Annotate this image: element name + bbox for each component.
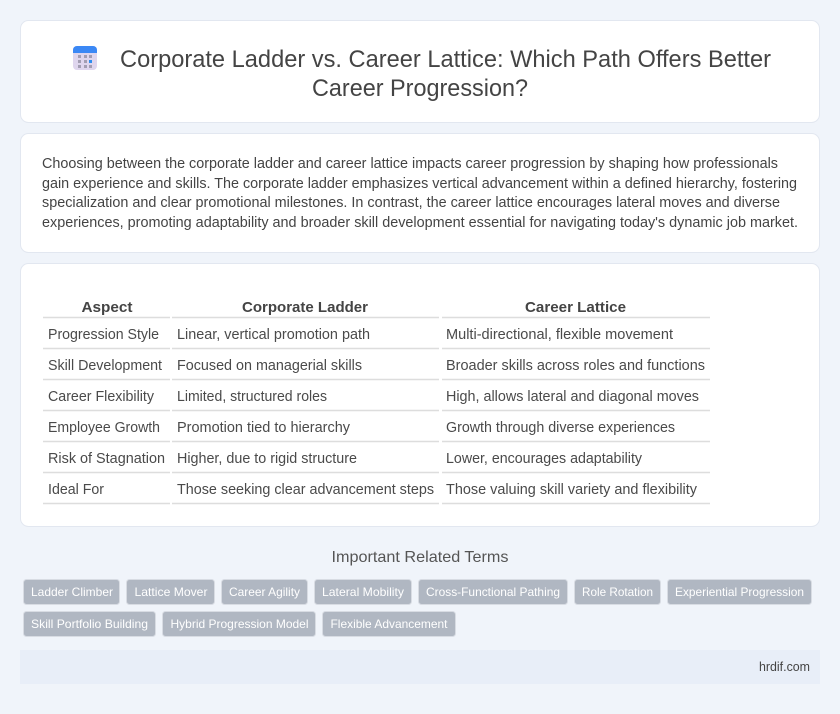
related term tags: Role Rotation [582,585,653,599]
related term tags: Ladder Climber [31,585,113,599]
footer [20,650,820,684]
title: Career Progression? [312,75,528,102]
row: ideal for: Those valuing skill variety and flexibility [446,482,698,498]
row: career flexibility [48,389,699,405]
row: progression style: Multi-directional, flexible movement [446,327,673,343]
row: ideal for: Those seeking clear advancement steps [177,482,434,498]
related term tags: Experiential Progression [675,585,804,599]
related term tags: Career Agility [229,585,300,599]
row: employee growth: Promotion tied to hierarchy [177,420,351,436]
row: progression style: Linear, vertical promotion path [177,327,370,343]
related term tags: Skill Portfolio Building [31,617,148,631]
title: Corporate Ladder vs. Career Lattice: Which Path Offers Better [120,46,771,73]
text block: introduction [42,156,798,231]
row: progression style: Progression Style [48,327,159,343]
row: ideal for [48,482,698,498]
row: employee growth: Growth through diverse experiences [446,420,675,436]
panel: introduction [20,134,820,252]
row: career flexibility: Career Flexibility [48,389,155,405]
title [120,46,771,102]
row: progression style [48,327,673,343]
related term tags: Hybrid Progression Model [170,617,308,631]
text block: introduction: Choosing between the corporate ladder and career lattice impacts career progression by shaping how professionals [42,156,778,172]
panel: comparison table [20,264,820,526]
row: skill development [48,358,705,374]
table header: Career Lattice [525,299,626,316]
text block: introduction: specialization and clear promotional milestones. In contrast, the career lattice encourages lateral moves and diverse [42,195,780,211]
related term tags [24,580,812,636]
row: risk of stagnation: Lower, encourages adaptability [446,451,643,467]
row: skill development: Skill Development [48,358,162,374]
row: risk of stagnation: Higher, due to rigid structure [177,451,357,467]
row: career flexibility: Limited, structured roles [177,389,327,405]
row: risk of stagnation [48,451,643,467]
text block: introduction: experiences, promoting adaptability and broader skill development essential for navigating today's dynamic job market. [42,215,798,231]
row: career flexibility: High, allows lateral and diagonal moves [446,389,699,405]
row: ideal for: Ideal For [48,482,104,498]
panel: header [20,20,820,122]
table header: Aspect [82,299,132,316]
heading: related terms: Important Related Terms [332,549,508,566]
row: risk of stagnation: Risk of Stagnation [48,451,165,467]
related term tags: Lattice Mover [134,585,208,599]
related term tags: Cross-Functional Pathing [426,585,560,599]
related term tags: Lateral Mobility [322,585,404,599]
icon: calendar [73,46,97,70]
row: employee growth: Employee Growth [48,420,160,436]
row: skill development: Focused on managerial skills [177,358,362,374]
row: skill development: Broader skills across roles and functions [446,358,705,374]
table header: Corporate Ladder [242,299,368,316]
text block: introduction: gain experience and skills. The corporate ladder emphasizes vertical advancement within a defined hierarchy, fostering [42,176,797,192]
footer: hrdif.com [759,660,810,674]
table header [82,299,626,316]
row: employee growth [48,420,675,436]
related term tags: Flexible Advancement [330,617,448,631]
